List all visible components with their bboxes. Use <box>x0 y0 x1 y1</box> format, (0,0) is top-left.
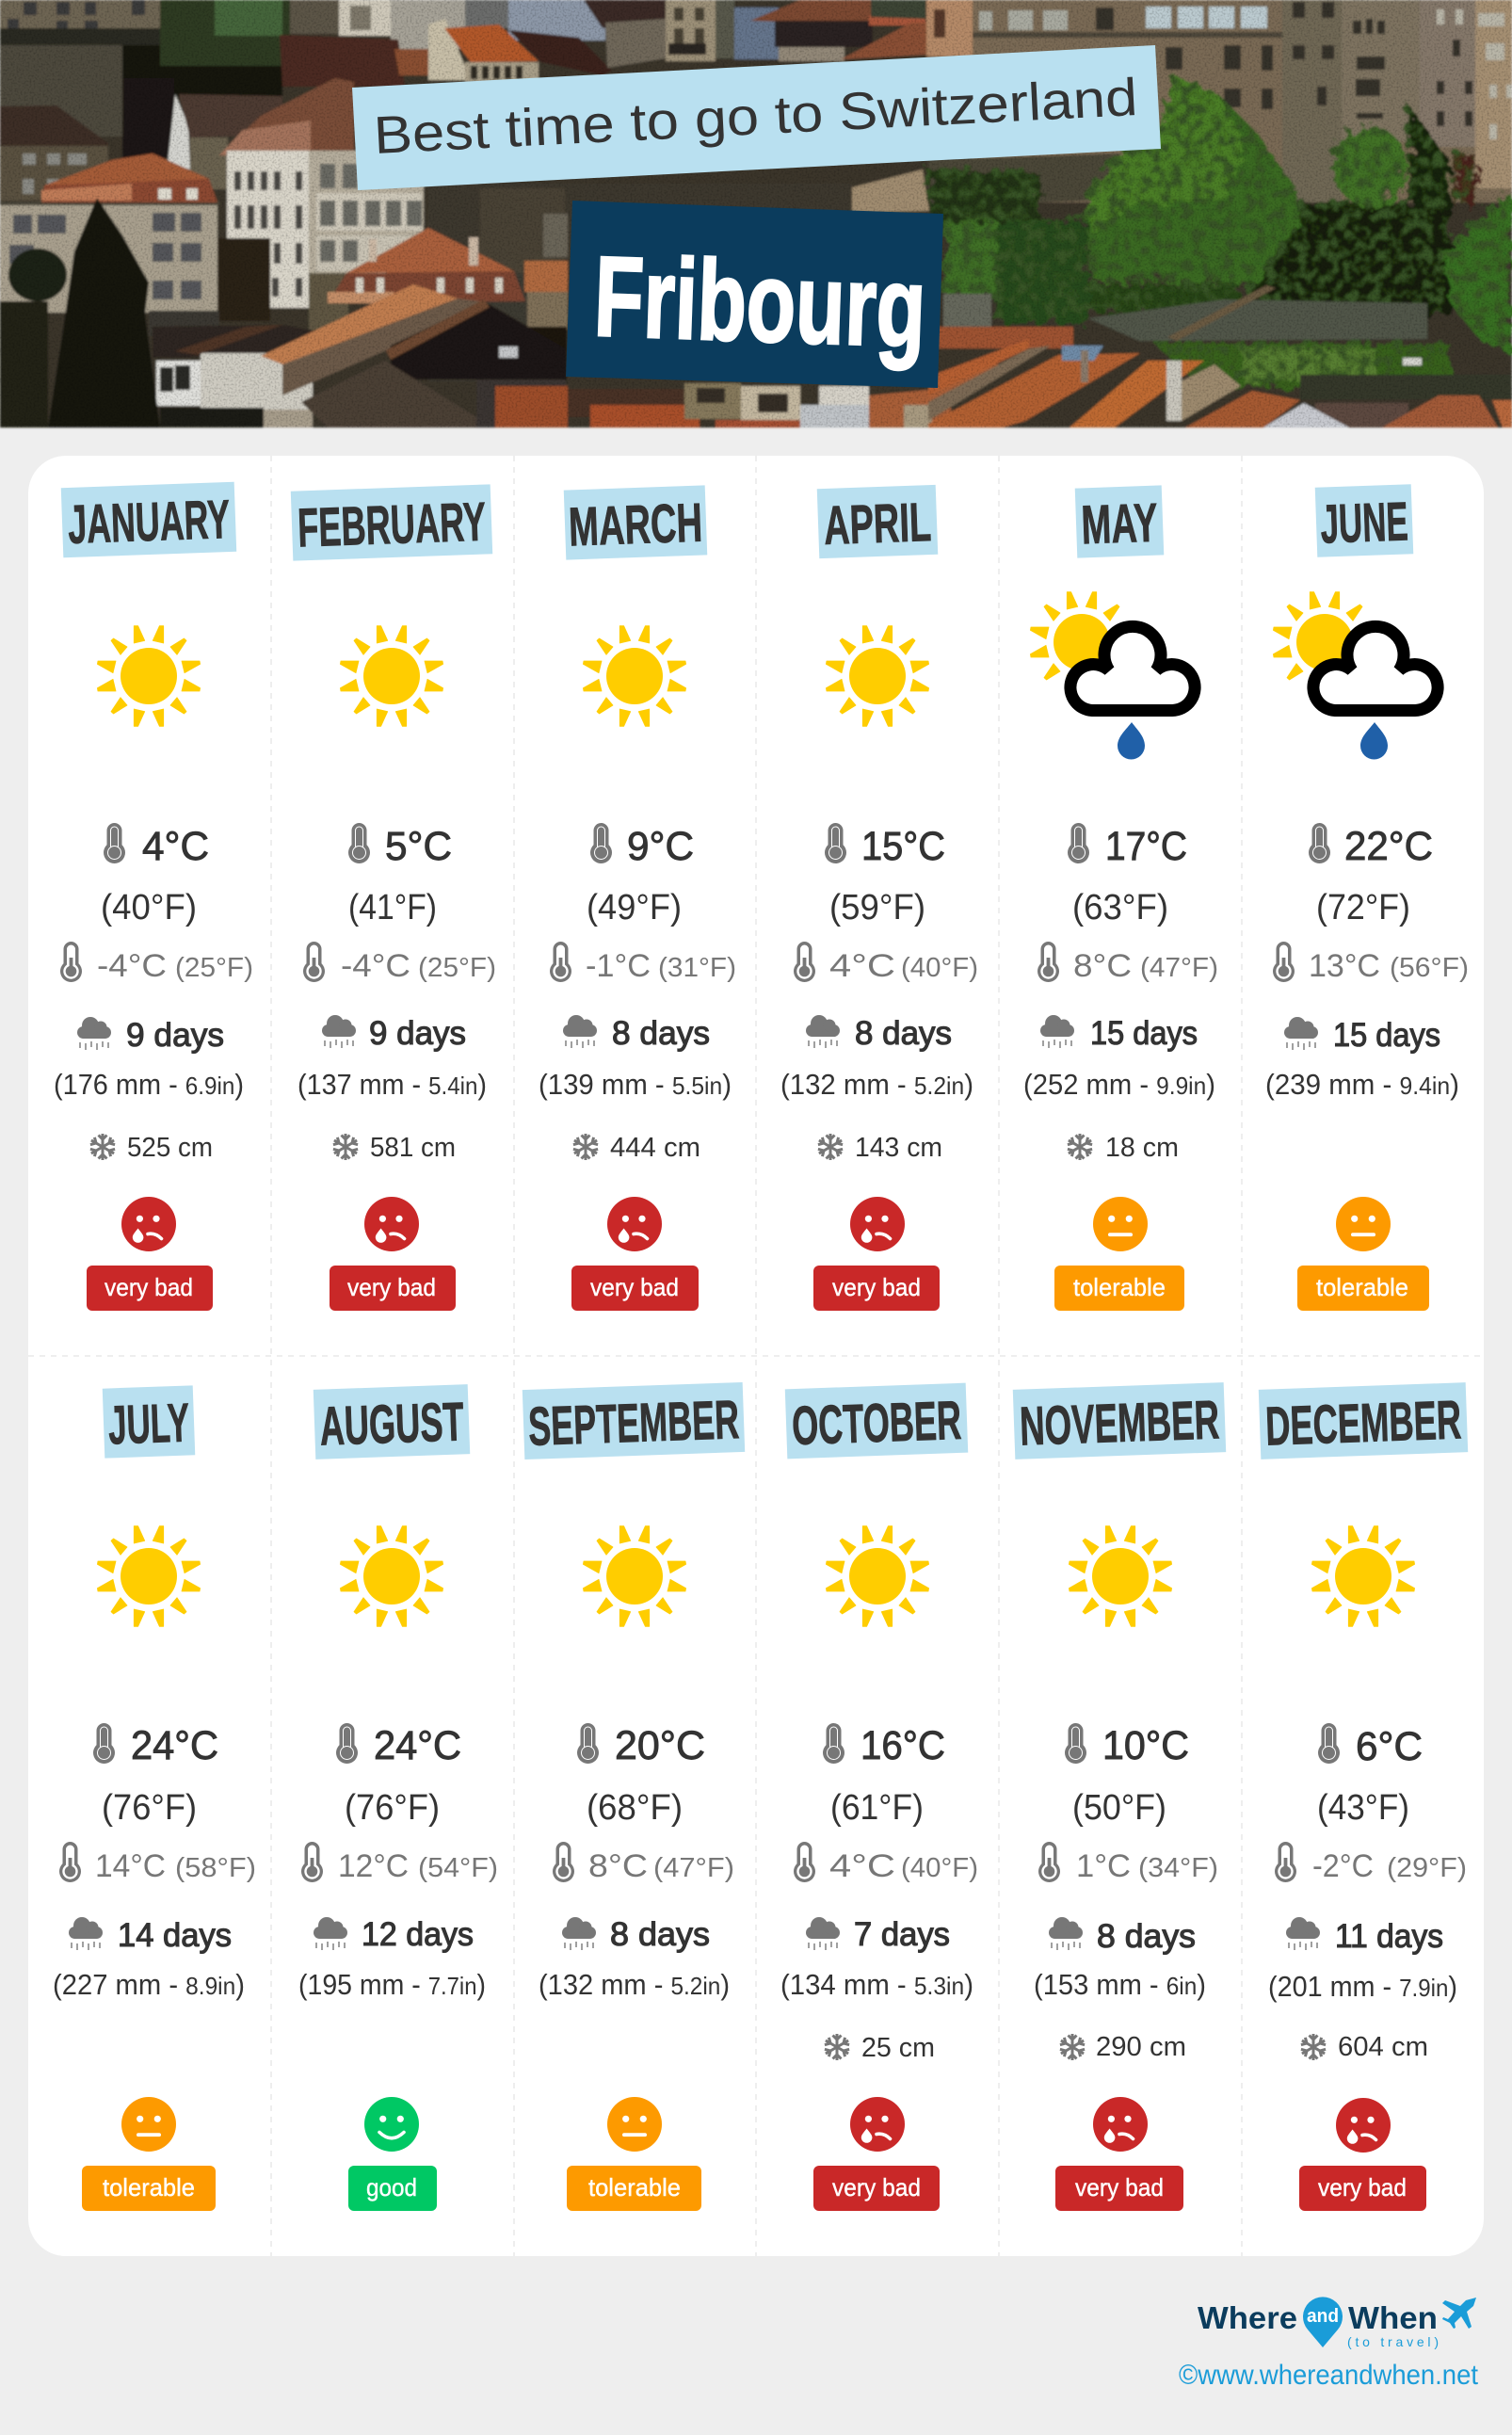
rainfall: (201 mm - 7.9in) <box>1268 1970 1457 2003</box>
rain days: 15 days <box>1333 1017 1440 1054</box>
high temperature: 5°C <box>385 824 452 869</box>
rating: very bad: very bad <box>832 2173 921 2201</box>
month label <box>1315 484 1413 557</box>
banner: subtitle: Best time to go to Switzerland <box>372 67 1139 165</box>
snowfall: 290 cm <box>1096 2032 1186 2062</box>
rain days: 9 days <box>126 1017 224 1054</box>
high temperature <box>1309 823 1433 869</box>
rating: very bad: very bad <box>105 1273 193 1301</box>
rainfall: (134 mm - 5.3in) <box>780 1968 973 2001</box>
low temperature: 1°C <box>1076 1848 1131 1884</box>
low temperature <box>553 1842 734 1884</box>
rain days: 14 days <box>118 1917 232 1954</box>
rating: very bad <box>330 1197 456 1311</box>
logo: Where and When: Where <box>1198 2300 1297 2335</box>
month label <box>564 485 707 560</box>
low temperature: -1°C <box>586 948 651 984</box>
panel: August <box>298 1384 498 2211</box>
low temperature: 4°C <box>829 1848 895 1884</box>
rating: good: good <box>366 2173 417 2201</box>
rating: tolerable <box>567 2097 701 2211</box>
month label <box>314 1384 470 1459</box>
high temperature fahrenheit: (49°F) <box>587 888 682 927</box>
low temperature: -4°C <box>97 948 167 984</box>
month label <box>785 1383 968 1459</box>
logo: Where and When: When <box>1348 2300 1438 2335</box>
high temperature: 20°C <box>615 1723 705 1768</box>
panel: March <box>539 485 736 1311</box>
high temperature fahrenheit: (50°F) <box>1072 1788 1166 1828</box>
rainfall: (153 mm - 6in) <box>1034 1968 1206 2001</box>
low temperature <box>550 942 736 984</box>
snowfall: 581 cm <box>370 1133 456 1163</box>
low temperature: 8°C <box>588 1848 648 1884</box>
month label: JANUARY <box>67 489 231 556</box>
rain days: 9 days <box>369 1015 466 1052</box>
high temperature <box>1068 823 1187 869</box>
high temperature fahrenheit: (72°F) <box>1316 888 1410 927</box>
high temperature <box>590 823 694 869</box>
low temperature: (58°F) <box>175 1853 256 1883</box>
panel: January <box>54 482 253 1311</box>
website credit: ©www.whereandwhen.net <box>1179 2360 1479 2391</box>
high temperature <box>825 823 945 869</box>
rating: tolerable: tolerable <box>1316 1273 1408 1301</box>
low temperature <box>794 942 978 984</box>
rainfall: (176 mm - 6.9in) <box>54 1068 244 1101</box>
panel: November <box>1013 1382 1226 2211</box>
low temperature: (29°F) <box>1387 1853 1467 1883</box>
rain days <box>314 1916 474 1953</box>
rain days <box>1286 1917 1443 1955</box>
high temperature: 15°C <box>861 824 945 869</box>
month label: NOVEMBER <box>1019 1389 1220 1458</box>
low temperature: (34°F) <box>1138 1853 1218 1883</box>
rainfall: (239 mm - 9.4in) <box>1265 1068 1459 1101</box>
low temperature <box>1038 1842 1218 1884</box>
icon: plane <box>1442 2298 1476 2329</box>
icon: sun and rain cloud <box>1273 592 1438 759</box>
rating: tolerable <box>1297 1197 1429 1311</box>
low temperature: (54°F) <box>418 1853 498 1883</box>
rain days: 8 days <box>612 1015 710 1052</box>
rainfall: (132 mm - 5.2in) <box>780 1068 973 1101</box>
low temperature: 14°C <box>95 1848 166 1884</box>
panel: July <box>53 1385 256 2211</box>
rating: very bad: very bad <box>1318 2173 1407 2201</box>
month label <box>1075 485 1164 558</box>
panel: April <box>780 485 978 1311</box>
rainfall: (137 mm - 5.4in) <box>298 1068 487 1101</box>
snowfall <box>824 2033 935 2063</box>
rating: very bad: very bad <box>347 1273 436 1301</box>
month label: APRIL <box>823 492 932 556</box>
snowfall: 604 cm <box>1338 2032 1428 2062</box>
banner: city title: Fribourg <box>592 232 928 371</box>
snowfall: 25 cm <box>861 2033 935 2063</box>
month label: FEBRUARY <box>297 492 487 558</box>
rain days: 8 days <box>1097 1918 1196 1955</box>
low temperature: (47°F) <box>1140 953 1218 983</box>
month label <box>61 482 236 557</box>
high temperature fahrenheit: (68°F) <box>587 1788 683 1828</box>
month label: JULY <box>107 1393 190 1456</box>
icon: sun <box>1311 1526 1415 1626</box>
high temperature <box>1318 1723 1423 1769</box>
high temperature: 4°C <box>142 824 209 869</box>
snowfall <box>817 1133 942 1163</box>
icon: sun <box>826 626 929 726</box>
low temperature: (25°F) <box>418 953 496 983</box>
rainfall: (227 mm - 8.9in) <box>53 1968 245 2001</box>
low temperature: 13°C <box>1309 948 1380 984</box>
rain days <box>562 1916 710 1953</box>
rain days <box>69 1917 232 1954</box>
panel: September <box>523 1382 745 2211</box>
high temperature fahrenheit: (41°F) <box>348 888 437 927</box>
rating: very bad <box>813 2097 940 2211</box>
snowfall <box>332 1133 456 1163</box>
panel: February <box>291 484 496 1311</box>
high temperature: 17°C <box>1105 824 1187 869</box>
high temperature: 9°C <box>627 824 694 869</box>
snowfall <box>89 1133 213 1163</box>
rain days <box>806 1916 950 1953</box>
low temperature: (31°F) <box>658 953 736 983</box>
panel: months table <box>28 456 1484 2256</box>
rain days <box>563 1015 710 1052</box>
high temperature: 16°C <box>861 1723 945 1768</box>
month label: MARCH <box>568 492 703 557</box>
high temperature <box>348 823 452 869</box>
high temperature fahrenheit: (76°F) <box>345 1788 440 1828</box>
rain days <box>1040 1015 1198 1052</box>
low temperature: (25°F) <box>175 953 253 983</box>
high temperature fahrenheit: (63°F) <box>1072 888 1168 927</box>
month label <box>103 1385 195 1459</box>
rainfall: (195 mm - 7.7in) <box>298 1968 486 2001</box>
low temperature <box>1037 942 1218 984</box>
rating: very bad: very bad <box>832 1273 921 1301</box>
snowfall: 18 cm <box>1105 1133 1179 1163</box>
high temperature: 24°C <box>374 1723 461 1768</box>
rating: tolerable: tolerable <box>1073 1273 1166 1301</box>
banner: city title <box>566 201 943 388</box>
high temperature fahrenheit: (40°F) <box>101 888 197 927</box>
month label: JUNE <box>1319 491 1409 556</box>
low temperature: -4°C <box>341 948 410 984</box>
low temperature: 12°C <box>338 1848 409 1884</box>
low temperature: (40°F) <box>901 953 978 983</box>
rating: tolerable: tolerable <box>103 2173 195 2201</box>
snowfall: 525 cm <box>127 1133 213 1163</box>
icon: sun and rain cloud <box>1030 592 1195 759</box>
rainfall: (132 mm - 5.2in) <box>539 1968 730 2001</box>
rating: very bad <box>571 1197 699 1311</box>
high temperature <box>1065 1723 1189 1768</box>
rain days <box>1284 1017 1440 1054</box>
logo: Where and When <box>1198 2297 1476 2349</box>
rain days: 8 days <box>610 1916 710 1953</box>
high temperature fahrenheit: (76°F) <box>102 1788 197 1828</box>
high temperature fahrenheit: (61°F) <box>830 1788 924 1828</box>
snowfall: 444 cm <box>610 1133 700 1163</box>
low temperature <box>1275 1842 1467 1884</box>
icon: sun <box>826 1526 929 1626</box>
high temperature: 6°C <box>1356 1724 1423 1769</box>
low temperature <box>301 1842 498 1884</box>
high temperature <box>104 823 209 869</box>
high temperature: 22°C <box>1344 824 1433 869</box>
rainfall: (252 mm - 9.9in) <box>1023 1068 1215 1101</box>
rain days: 7 days <box>854 1916 950 1953</box>
rating: very bad <box>1299 2098 1426 2211</box>
month label: AUGUST <box>318 1391 465 1458</box>
high temperature <box>823 1723 945 1768</box>
high temperature <box>93 1723 218 1768</box>
high temperature <box>336 1723 461 1768</box>
low temperature: (56°F) <box>1390 953 1469 983</box>
icon: sun <box>340 626 443 726</box>
high temperature: 10°C <box>1102 1723 1189 1768</box>
low temperature: (40°F) <box>901 1853 978 1883</box>
snowfall: 143 cm <box>855 1133 942 1163</box>
rain days: 15 days <box>1090 1015 1198 1052</box>
icon: sun <box>97 626 201 726</box>
rating: good <box>348 2097 437 2211</box>
rating: tolerable <box>82 2097 216 2211</box>
snowfall <box>1067 1133 1179 1163</box>
icon: sun <box>583 1526 686 1626</box>
month label <box>523 1382 745 1459</box>
header photo: Fribourg old town <box>0 0 1512 427</box>
high temperature fahrenheit: (43°F) <box>1317 1788 1409 1828</box>
icon: map pin <box>1303 2297 1343 2347</box>
icon: sun <box>340 1526 443 1626</box>
rain days <box>77 1017 224 1054</box>
panel: October <box>780 1383 978 2211</box>
rainfall: (139 mm - 5.5in) <box>539 1068 732 1101</box>
low temperature <box>794 1842 978 1884</box>
rain days: 11 days <box>1335 1918 1443 1955</box>
month label: SEPTEMBER <box>527 1389 740 1458</box>
rating: very bad: very bad <box>590 1273 679 1301</box>
rain days <box>322 1015 466 1052</box>
banner: subtitle <box>352 45 1161 190</box>
snowfall <box>1300 2032 1428 2062</box>
low temperature <box>1273 942 1469 984</box>
month label: OCTOBER <box>791 1390 962 1457</box>
rating: tolerable <box>1054 1197 1184 1311</box>
month label <box>291 484 492 561</box>
icon: sun <box>583 626 686 726</box>
icon: sun <box>97 1526 201 1626</box>
panel: May <box>1023 485 1218 1311</box>
icon: map pin: and <box>1307 2306 1339 2327</box>
low temperature <box>59 1842 256 1884</box>
month label <box>817 485 938 558</box>
low temperature: (47°F) <box>653 1853 734 1883</box>
low temperature: -2°C <box>1312 1848 1374 1884</box>
low temperature <box>303 942 496 984</box>
rain days: 8 days <box>855 1015 952 1052</box>
month label <box>1013 1382 1226 1459</box>
month label: MAY <box>1080 492 1159 556</box>
snowfall <box>572 1133 700 1163</box>
panel: December <box>1259 1382 1468 2211</box>
rating: tolerable: tolerable <box>588 2173 681 2201</box>
rain days: 12 days <box>362 1916 474 1953</box>
logo: Where and When: (to travel) <box>1347 2334 1439 2349</box>
rain days <box>806 1015 952 1052</box>
high temperature fahrenheit: (59°F) <box>829 888 925 927</box>
rating: very bad: very bad <box>1075 2173 1164 2201</box>
icon: sun <box>1069 1526 1172 1626</box>
rating: very bad <box>813 1197 940 1311</box>
panel: June <box>1265 484 1469 1311</box>
rating: very bad <box>1055 2097 1183 2211</box>
rain days <box>1049 1917 1196 1955</box>
low temperature: 4°C <box>829 948 895 984</box>
low temperature <box>60 942 253 984</box>
rating: very bad <box>87 1197 213 1311</box>
low temperature: 8°C <box>1073 948 1132 984</box>
high temperature: 24°C <box>131 1723 218 1768</box>
